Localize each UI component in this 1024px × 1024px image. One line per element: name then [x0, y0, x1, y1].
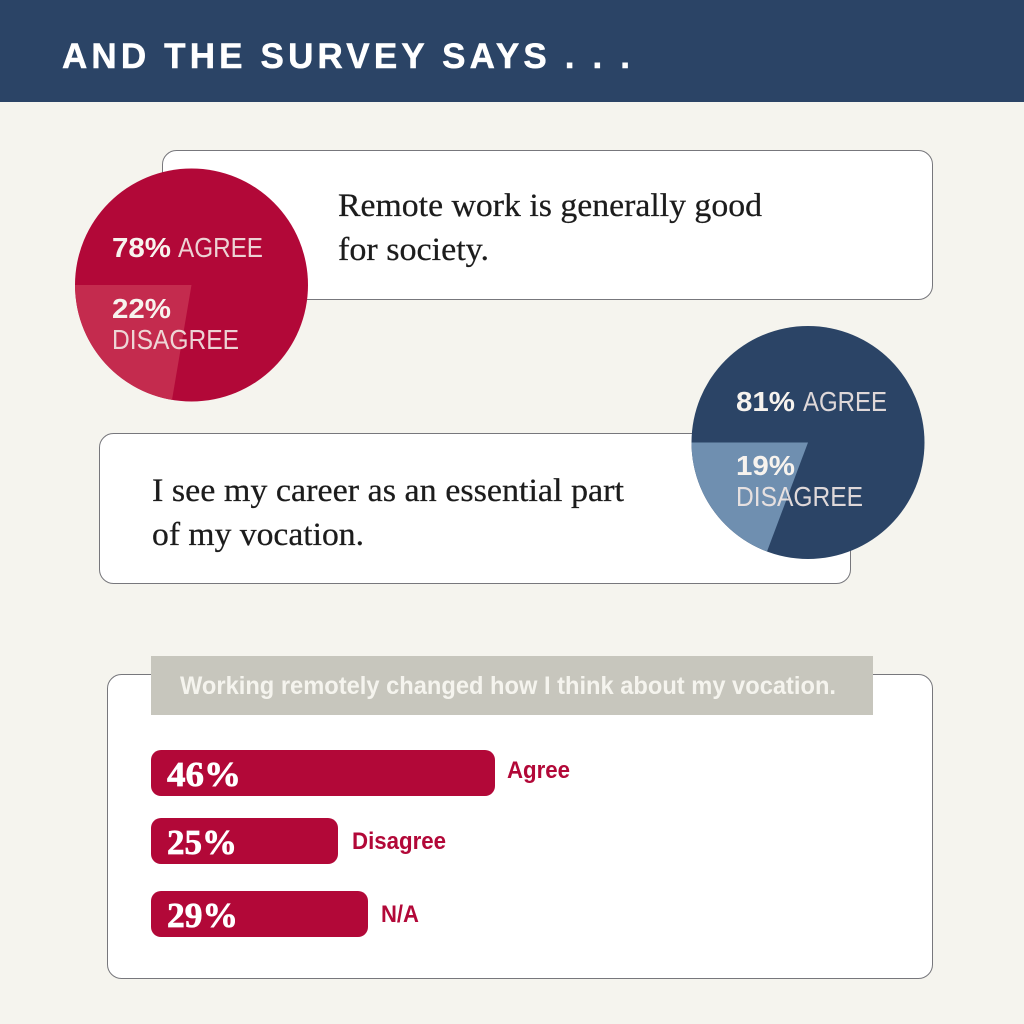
statement text: remote work: Remote work is generally good: [338, 188, 763, 224]
pie label: 22% disagree: 22%: [112, 293, 171, 324]
statement text: career: I see my career as an essential part: [152, 473, 624, 509]
bar: 25% disagree: Disagree: [352, 828, 446, 855]
panel: remote work statement: [162, 150, 932, 300]
bar: 29% n/a: [151, 891, 419, 937]
pie label: 22% disagree: DISAGREE: [112, 324, 239, 355]
bar: 46% agree: 46%: [167, 755, 241, 794]
bar: 46% agree: [151, 750, 570, 796]
pie slice: 22% disagree: [75, 285, 192, 400]
pie label: 81% agree: [736, 386, 887, 417]
bar: 29% n/a: N/A: [381, 901, 419, 928]
panel: career statement: [100, 434, 850, 584]
pie chart: remote work 78 / 22: [75, 168, 308, 402]
bar: 46% agree: Agree: [507, 757, 570, 784]
heading banner: Working remotely changed how I think about my vocation.: [180, 672, 836, 700]
pie label: 19% disagree: DISAGREE: [736, 481, 863, 512]
statement text: remote work: for society.: [338, 232, 489, 268]
pie label: 81% agree: AGREE: [803, 386, 887, 417]
pie label: 78% agree: AGREE: [178, 232, 263, 263]
pie label: 19% disagree: [736, 450, 863, 512]
bar: 25% disagree: 25%: [167, 823, 237, 862]
header band: [0, 0, 1024, 102]
heading banner: [151, 656, 873, 715]
panel: vocation bar chart: [108, 656, 932, 978]
pie label: 78% agree: [112, 232, 263, 263]
pie label: 81% agree: 81%: [736, 386, 795, 417]
pie label: 19% disagree: 19%: [736, 450, 795, 481]
statement text: career: of my vocation.: [152, 517, 364, 553]
pie label: 78% agree: 78%: [112, 232, 171, 263]
bar: 29% n/a: 29%: [167, 896, 238, 935]
pie chart: career 81 / 19: [692, 326, 924, 559]
title: AND THE SURVEY SAYS . . .: [62, 37, 630, 76]
pie label: 22% disagree: [112, 293, 239, 355]
pie slice: 19% disagree: [692, 442, 808, 552]
bar: 25% disagree: [151, 818, 446, 864]
